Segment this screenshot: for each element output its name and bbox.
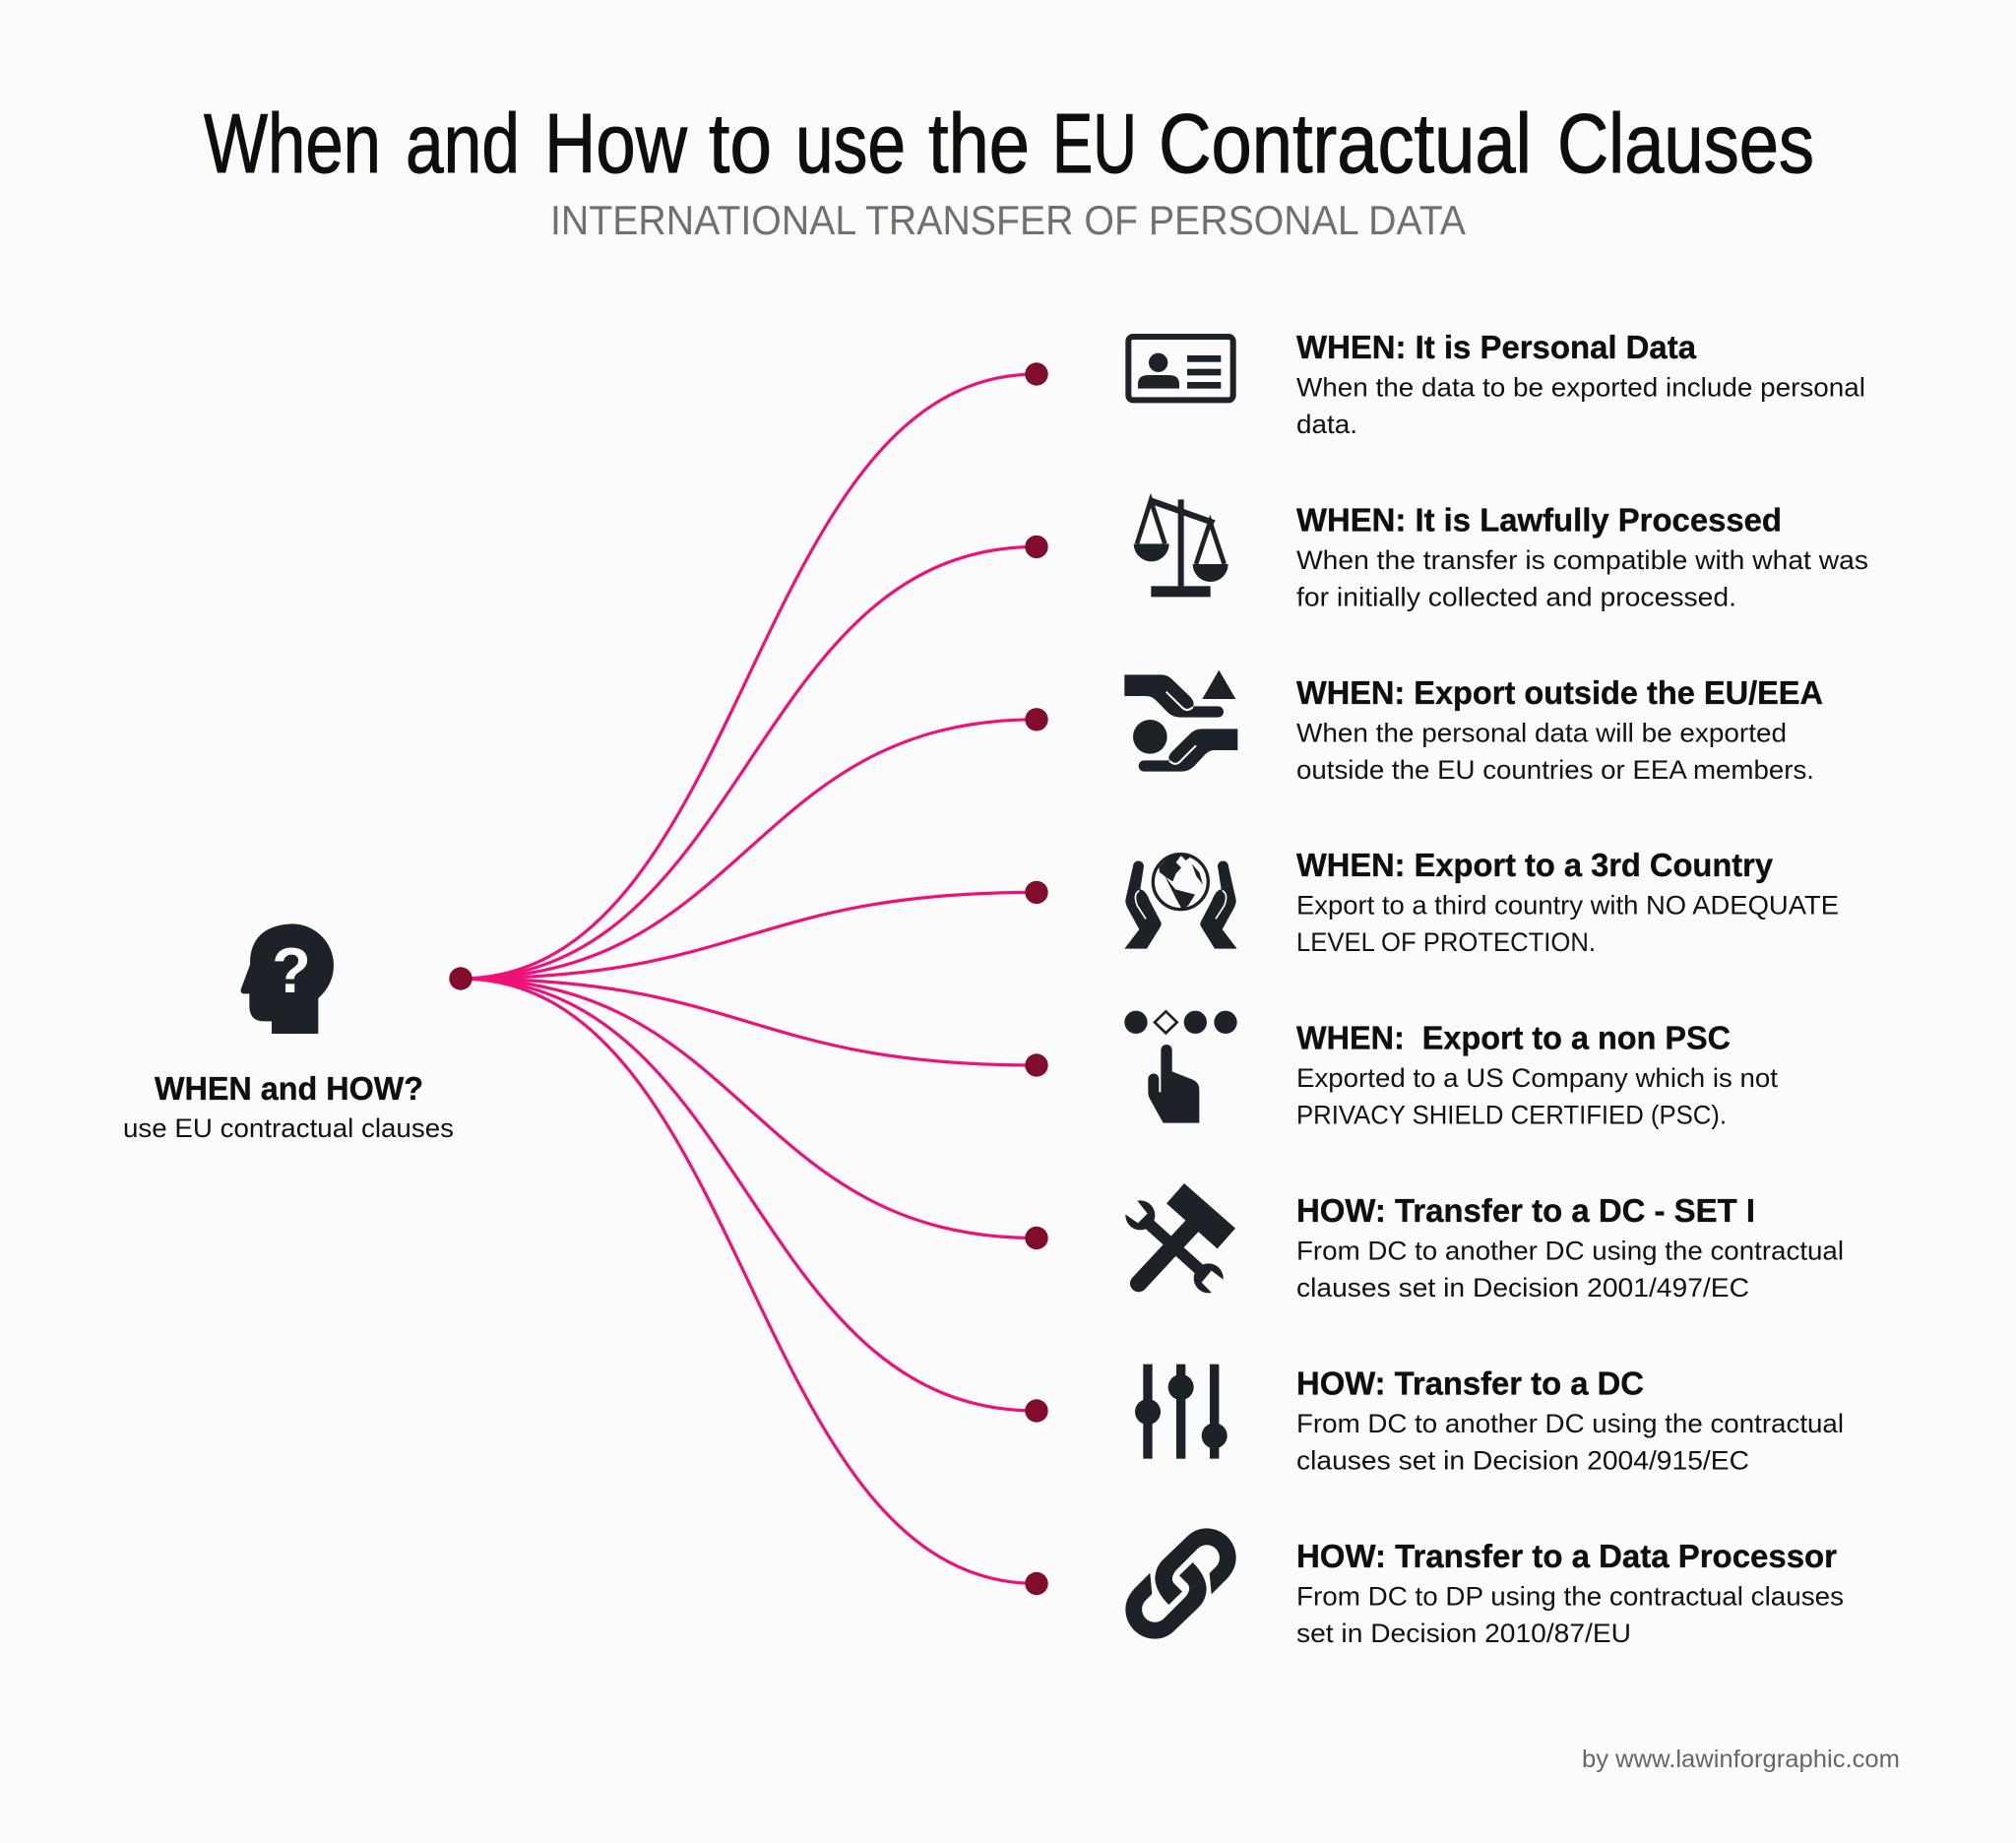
subtitle: INTERNATIONAL TRANSFER OF PERSONAL DATA <box>550 197 1466 243</box>
description: When the personal data will be exported <box>1296 718 1787 747</box>
title: EU <box>1052 97 1137 191</box>
connector dots <box>449 362 1048 1595</box>
description: for initially collected and processed. <box>1296 582 1736 611</box>
heading: HOW: Transfer to a DC <box>1296 1365 1644 1401</box>
title: How <box>544 97 688 191</box>
description: From DC to another DC using the contractual <box>1296 1409 1844 1438</box>
footer credit: by www.lawinforgraphic.com <box>1582 1746 1900 1773</box>
row: transfer to a DC set I <box>1120 1183 1844 1303</box>
heading: WHEN: Export to a non PSC <box>1296 1020 1731 1056</box>
heading: WHEN: Export outside the EU/EEA <box>1296 674 1823 711</box>
row: transfer to a data processor <box>1125 1528 1844 1648</box>
icon: exchanging hands <box>1124 670 1237 772</box>
icon: hammer and wrench <box>1120 1183 1235 1298</box>
description <box>1296 1063 1779 1130</box>
description: Export to a third country with NO ADEQUATE <box>1296 891 1839 921</box>
icon: ID card <box>1128 337 1233 400</box>
description <box>1296 1581 1844 1648</box>
panel: when and how <box>123 923 454 1143</box>
heading: HOW: Transfer to a Data Processor <box>1296 1538 1837 1574</box>
description <box>1296 718 1814 785</box>
heading: when and how: WHEN and HOW? <box>155 1070 423 1107</box>
description: When the data to be exported include personal <box>1296 372 1865 402</box>
description: data. <box>1296 410 1357 439</box>
row: personal data <box>1128 329 1865 439</box>
icon: finger pointing at selection <box>1124 1011 1237 1123</box>
text: use EU contractual clauses: use EU contractual clauses <box>123 1113 454 1143</box>
description: clauses set in Decision 2004/915/EC <box>1296 1445 1749 1475</box>
description: PRIVACY SHIELD CERTIFIED (PSC). <box>1296 1101 1727 1130</box>
row: export outside EU <box>1124 670 1823 785</box>
description: From DC to DP using the contractual clauses <box>1296 1581 1844 1611</box>
description <box>1296 1409 1844 1475</box>
title: When <box>204 97 381 191</box>
description: outside the EU countries or EEA members. <box>1296 755 1814 785</box>
description: set in Decision 2010/87/EU <box>1296 1619 1631 1648</box>
title: use <box>795 97 906 191</box>
title: the <box>928 97 1030 191</box>
description: When the transfer is compatible with what was <box>1296 545 1868 575</box>
icon: sliders <box>1135 1365 1228 1459</box>
description <box>1296 372 1865 439</box>
icon: hands holding globe <box>1124 855 1237 949</box>
title: Clauses <box>1557 97 1814 191</box>
connector curves <box>461 374 1037 1583</box>
row: non PSC <box>1124 1011 1779 1130</box>
heading: WHEN: It is Personal Data <box>1296 329 1697 365</box>
title: Contractual <box>1159 97 1532 191</box>
heading: WHEN: Export to a 3rd Country <box>1296 847 1774 883</box>
description <box>1296 891 1839 957</box>
description <box>1296 545 1868 611</box>
title: to <box>709 97 772 191</box>
row: 3rd country <box>1124 847 1839 957</box>
icon: head with question mark <box>241 923 334 1034</box>
row: transfer to a DC <box>1135 1365 1844 1475</box>
heading: HOW: Transfer to a DC - SET I <box>1296 1192 1755 1229</box>
icon: head with question mark: ? <box>272 934 311 1006</box>
icon: chain link <box>1125 1528 1236 1639</box>
description: From DC to another DC using the contractual <box>1296 1237 1844 1266</box>
heading: WHEN: It is Lawfully Processed <box>1296 501 1782 538</box>
description: Exported to a US Company which is not <box>1296 1063 1779 1093</box>
title: and <box>406 97 520 191</box>
description: clauses set in Decision 2001/497/EC <box>1296 1273 1749 1303</box>
description: LEVEL OF PROTECTION. <box>1296 927 1596 957</box>
row: lawfully processed <box>1134 497 1868 611</box>
description <box>1296 1237 1844 1303</box>
icon: scales <box>1134 497 1228 597</box>
